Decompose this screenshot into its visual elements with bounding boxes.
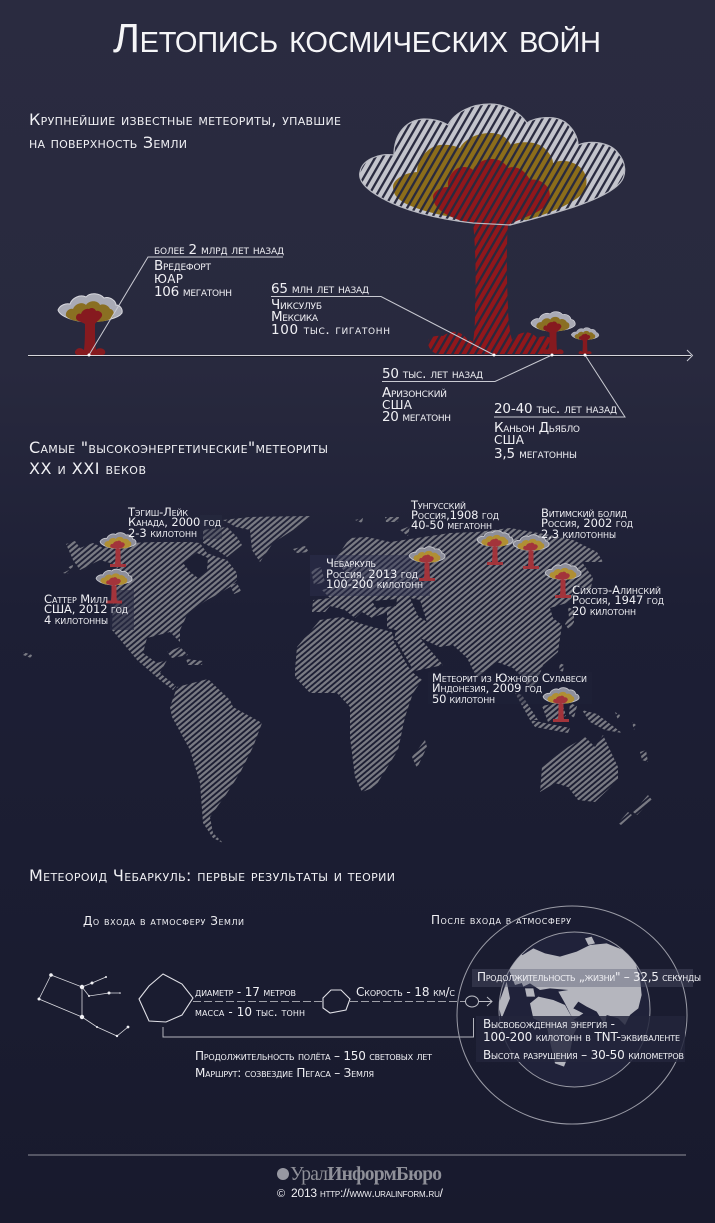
label: Chicxulub: 100 тыс. гигатонн: [271, 322, 390, 338]
label: Canyon Diablo: Каньон Дьябло: [494, 420, 580, 436]
Iceland: [293, 546, 309, 553]
label: Chicxulub: 65 млн лет назад: [271, 281, 369, 297]
heading: largest meteorites: [29, 110, 341, 152]
mushroom Sulawesi: [543, 688, 579, 722]
label: Vredefort: более 2 млрд лет назад: [154, 242, 284, 258]
map label: Sikhote-Alin: 20 килотонн: [572, 604, 636, 618]
icon: Pegasus constellation: [38, 973, 129, 1037]
map label: Sutter Mill: Саттер Милл: [44, 592, 108, 606]
label: Arizona: 50 тыс. лет назад: [382, 366, 483, 382]
New Zealand: [618, 795, 652, 825]
Britain: [311, 567, 325, 585]
panel: life duration bar: Продолжительность „жизни" – 32,5 секунды: [477, 970, 701, 984]
map label: Tegish Lake: 2-3 килотонн: [128, 526, 197, 540]
map label: Tunguska: [410, 498, 499, 532]
chart: timeline axis: [28, 350, 692, 361]
mushroom Tegish Lake: [100, 533, 136, 567]
label: Chicxulub: Чиксулуб: [271, 297, 322, 313]
map label: Chebarkul: Чебаркуль: [326, 556, 376, 570]
copyright: ©: [277, 1188, 285, 1200]
map label: Sikhote-Alin: Россия, 1947 год: [572, 593, 664, 607]
label: Canyon Diablo: 20-40 тыс. лет назад: [494, 401, 617, 417]
label: diameter and mass: диаметр - 17 метров: [195, 985, 296, 999]
label: diameter and mass: [195, 985, 305, 1019]
heading: high-energy meteorites: [29, 438, 328, 478]
mushroom Tunguska: [477, 531, 513, 565]
icon: Earth globe with atmosphere rings: [457, 906, 687, 1124]
map label: Chebarkul: [326, 556, 423, 591]
flight path dashed line: [193, 1000, 466, 1002]
label: Canyon Diablo: [494, 401, 617, 462]
mushroom Sikhote-Alin: [545, 564, 581, 598]
label: Vredefort: [154, 242, 284, 300]
icon: giant mushroom cloud Chicxulub: [360, 104, 625, 354]
map label: Vitim: Россия, 2002 год: [541, 516, 633, 530]
panel: energy and height: Высота разрушения – 30-50 километров: [483, 1048, 684, 1062]
Eurasia: [312, 528, 603, 690]
map label: Sulawesi: Метеорит из Южного Сулавеси: [432, 671, 587, 685]
bracket: flight duration: [163, 1018, 474, 1037]
heading: high-energy meteorites: Самые "высокоэнергетические"метеориты: [29, 438, 328, 457]
Philippines and Indonesia: [515, 663, 622, 733]
South America: [170, 679, 262, 843]
map label: Sulawesi: Индонезия, 2009 год: [432, 681, 542, 695]
mushroom Sutter Mill: [96, 569, 132, 604]
Newfoundland: [230, 583, 241, 594]
map label: Chebarkul: Россия, 2013 год: [326, 567, 418, 581]
map label: Chebarkul: 100-200 килотонн: [326, 577, 423, 591]
Madagascar: [412, 740, 427, 768]
label: Vredefort: ЮАР: [154, 272, 183, 286]
map label: Tegish Lake: Тэгиш-Лейк: [127, 505, 188, 519]
label: diameter and mass: масса - 10 тыс. тонн: [195, 1005, 305, 1019]
map label: Sulawesi: [432, 671, 587, 706]
heading: largest meteorites: Крупнейшие известные метеориты, упавшие: [29, 110, 341, 129]
icon: mushroom Vredefort: [58, 294, 122, 355]
label: flight route: [195, 1049, 432, 1080]
icon: mushroom Arizona: [531, 312, 575, 354]
mushroom Chebarkul: [409, 547, 445, 581]
map label: Tegish Lake: [127, 505, 221, 540]
Pacific islands: [23, 652, 648, 762]
icon: meteoroid before entry: [139, 974, 193, 1022]
label: speed: Скорость - 18 км/с: [356, 985, 455, 999]
label: Arizona: Аризонский: [382, 385, 447, 401]
Japan: [565, 607, 574, 630]
Greenland: [223, 516, 310, 562]
Caribbean: [167, 647, 203, 665]
Alaska islands: [63, 565, 73, 574]
map seas: [183, 553, 427, 668]
copyright: 2013 http://www.uralinform.ru/: [291, 1186, 444, 1200]
map label: Tunguska: Тунгусский: [410, 498, 466, 512]
label: Canyon Diablo: США: [494, 433, 525, 447]
world map: [23, 516, 652, 843]
logo: УралИнформБюро: [290, 1164, 442, 1185]
panel: energy and height: 100-200 килотонн в TNT-эквиваленте: [483, 1030, 680, 1044]
map label: Tunguska: Россия,1908 год: [411, 508, 499, 522]
label: Vredefort: 106 мегатонн: [154, 284, 232, 300]
North America: [66, 541, 237, 690]
icon: mushroom Canyon Diablo: [571, 328, 599, 354]
Arctic islands: [355, 517, 410, 536]
icons: mushrooms on map: [96, 531, 581, 722]
map label: Tegish Lake: Канада, 2000 год: [128, 515, 221, 529]
map label: Sutter Mill: 4 килотонны: [44, 613, 108, 627]
map label: Vitim: 2,3 килотонны: [541, 527, 616, 541]
label: flight route: Продолжительность полёта – 150 световых лет: [195, 1049, 432, 1063]
map label: Tunguska: 40-50 мегатонн: [411, 518, 492, 532]
icon: meteoroid during flight: [323, 990, 350, 1013]
map label: Sikhote-Alin: [572, 583, 664, 618]
heading: Chebarkul meteoroid: Метеороид Чебаркуль: первые результаты и теории: [29, 866, 395, 885]
map label: Vitim: [541, 506, 633, 541]
map label: Sutter Mill: [44, 592, 128, 627]
label shading on map: [110, 515, 592, 704]
divider: [28, 1154, 686, 1156]
map label: Sulawesi: 50 килотонн: [432, 692, 495, 706]
label: Arizona: 20 мегатонн: [382, 409, 451, 425]
panel: energy and height: Высвобожденная энергия -: [483, 1017, 615, 1031]
map label: Sikhote-Alin: Сихотэ-Алинский: [572, 583, 661, 597]
label: Arizona: [382, 366, 483, 425]
label: Canyon Diablo: 3,5 мегатонны: [494, 446, 577, 462]
subheading: after atmosphere: После входа в атмосферу: [431, 913, 571, 927]
Africa: [295, 617, 422, 792]
label: Vredefort: Вредефорт: [154, 258, 212, 274]
map label: Sutter Mill: США, 2012 год: [44, 602, 128, 616]
label: Chicxulub: [271, 281, 390, 338]
mushroom Vitim: [513, 535, 549, 569]
subheading: before atmosphere: До входа в атмосферу Земли: [83, 914, 244, 928]
Australia: [540, 735, 618, 802]
heading: high-energy meteorites: XX и XXI веков: [29, 459, 146, 478]
leader lines: [88, 257, 625, 417]
label: Arizona: США: [382, 398, 413, 412]
panel: energy and height: [476, 1016, 685, 1062]
heading: largest meteorites: на поверхность Земли: [29, 133, 187, 152]
map label: Vitim: Витимский болид: [541, 506, 627, 520]
label: flight route: Маршрут: созвездие Пегаса – Земля: [195, 1066, 374, 1080]
Canadian arctic islands: [203, 527, 242, 557]
label: Chicxulub: Мексика: [271, 309, 319, 325]
title: Летопись космических войн: [113, 15, 601, 61]
